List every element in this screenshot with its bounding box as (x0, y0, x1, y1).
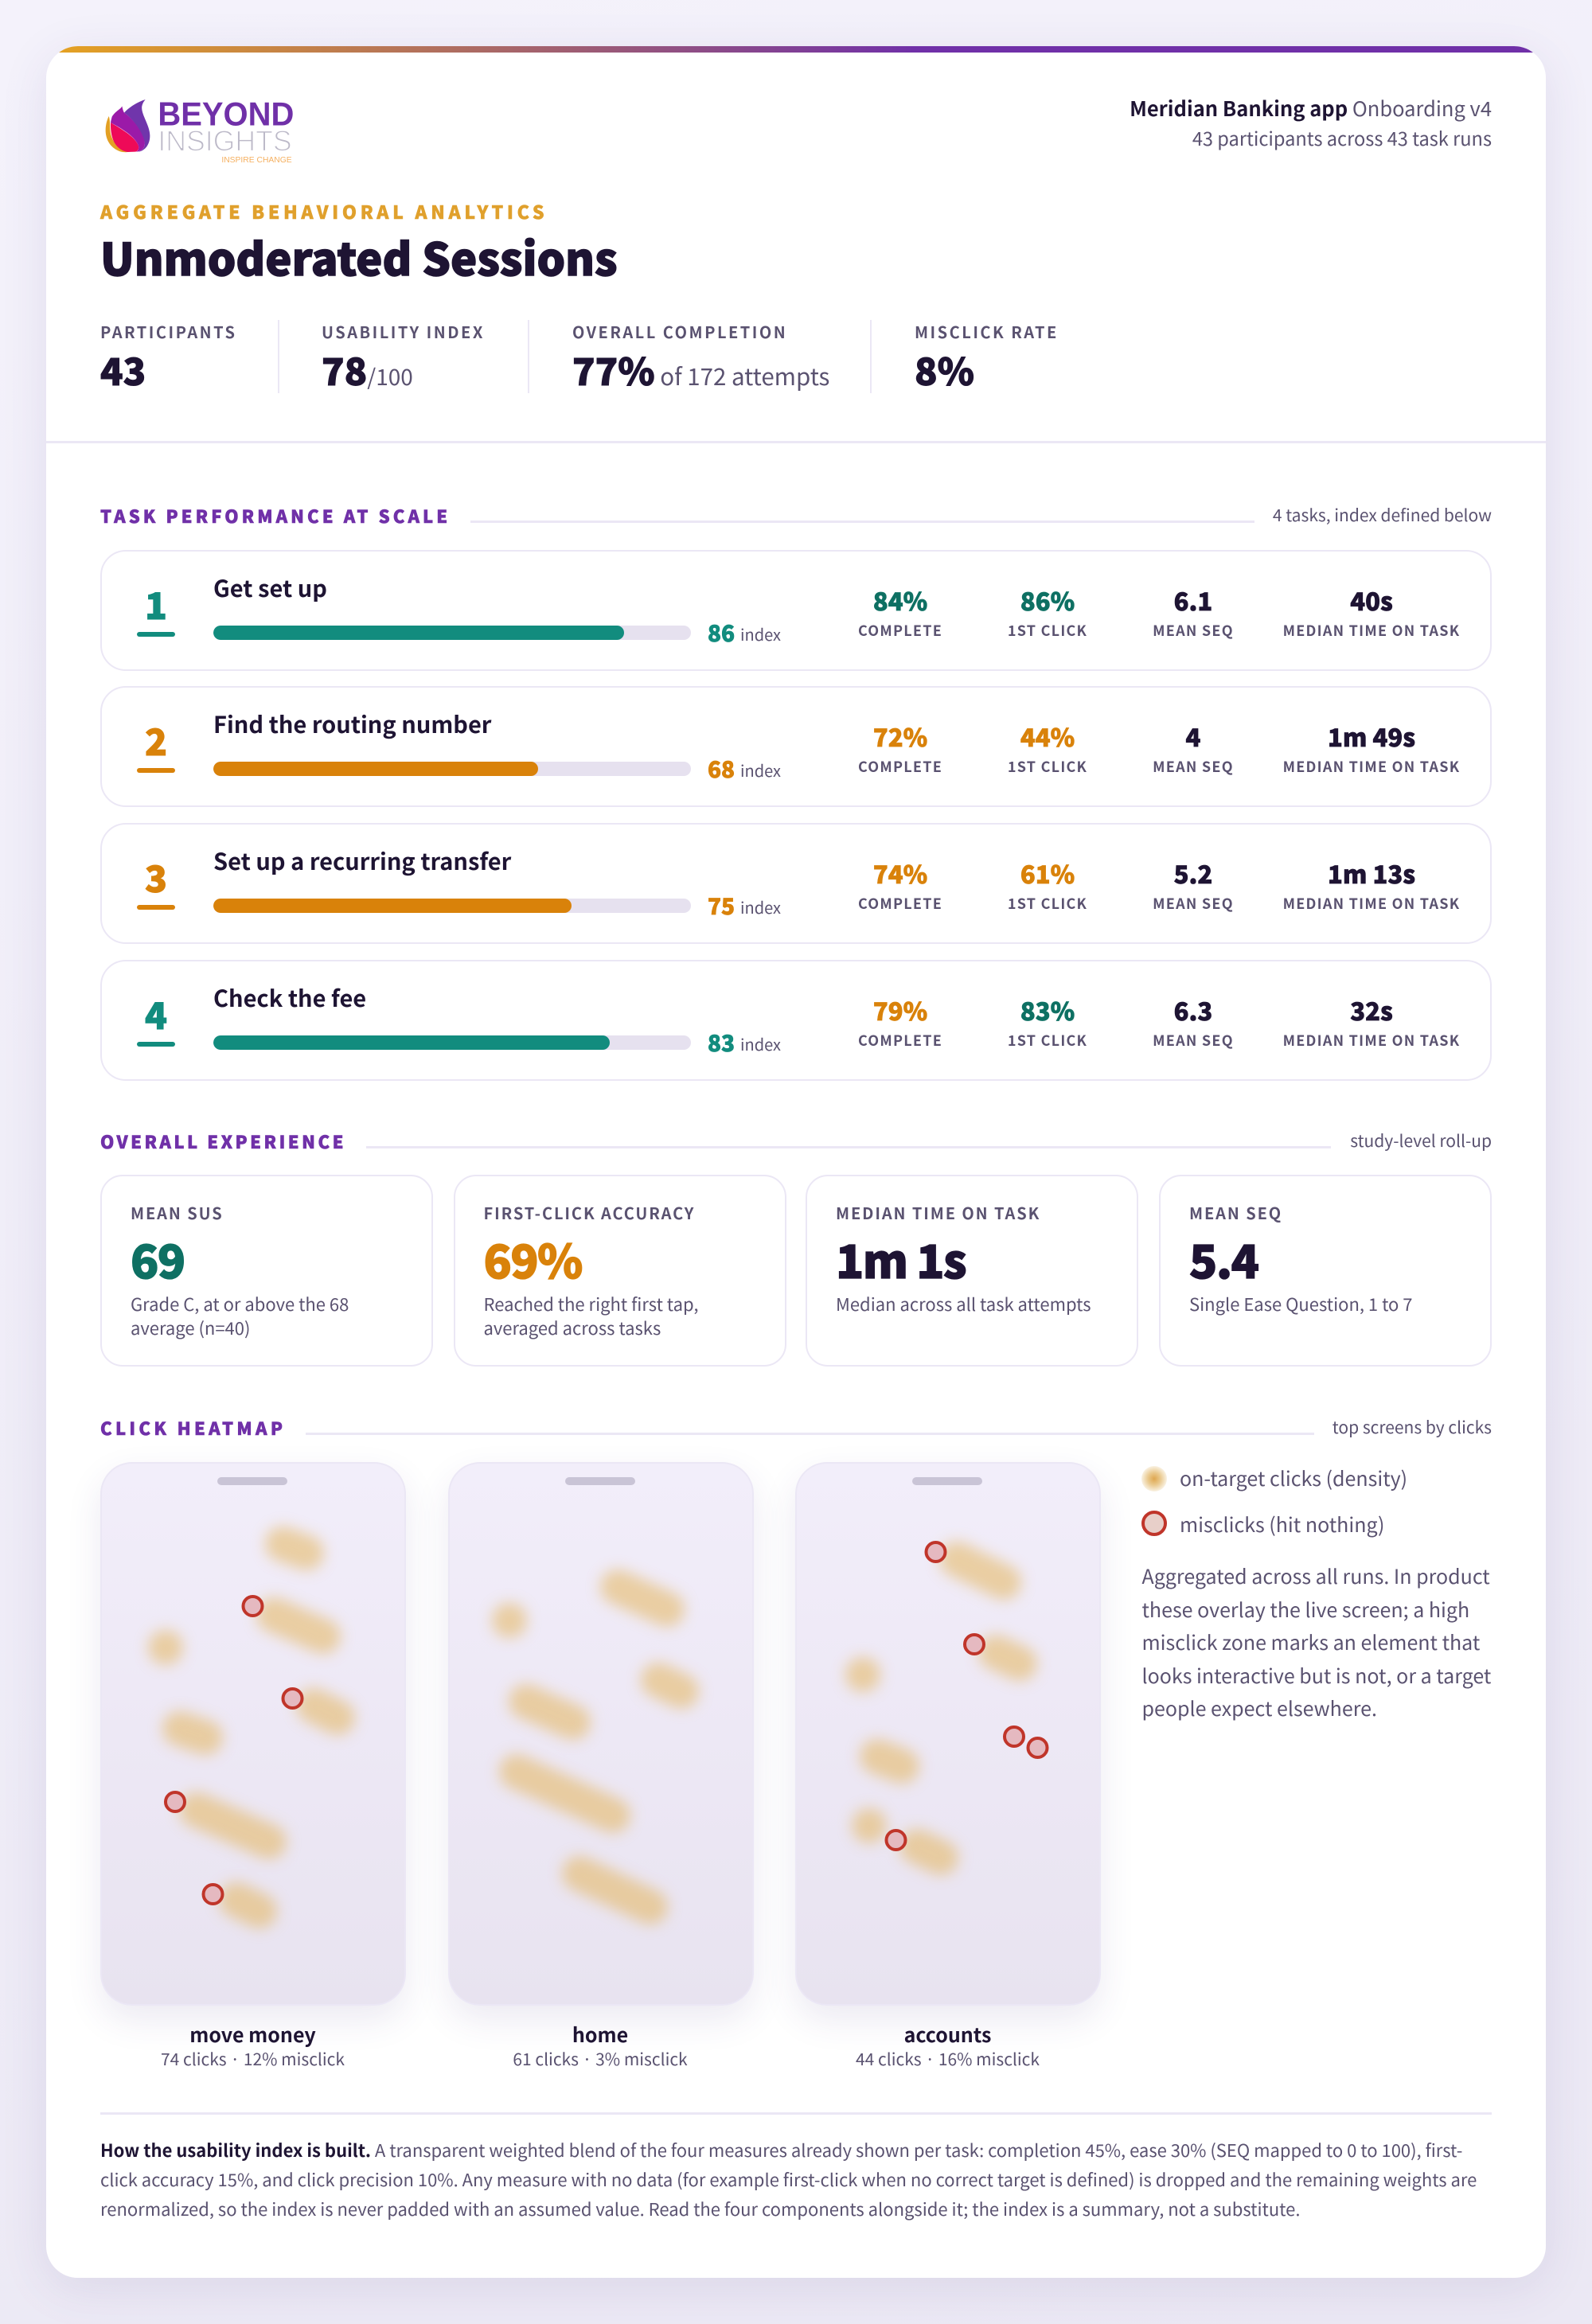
stat card: mean SUS: 69 (131, 1225, 185, 1292)
stat: overall completion (529, 320, 872, 393)
task row 2: 72% (873, 718, 927, 754)
caption: move money: move money (189, 2020, 316, 2049)
legend explanation: misclick zone marks an element that (1141, 1628, 1480, 1656)
stat card: median time on task: MEDIAN TIME ON TASK (836, 1201, 1040, 1224)
section heading: click heatmap: CLICK HEATMAP (100, 1415, 286, 1441)
task row 4: MEDIAN TIME ON TASK (1283, 1030, 1460, 1051)
task row 3: 1ST CLICK (1008, 893, 1087, 914)
stat card: first-click accuracy: FIRST-CLICK ACCURACY (484, 1201, 695, 1224)
section heading: click heatmap (100, 1415, 1492, 1441)
eyebrow: AGGREGATE BEHAVIORAL ANALYTICS (100, 197, 548, 224)
task row 1: 6.1 (1174, 582, 1212, 618)
task row 3: 74% (873, 855, 927, 891)
stat card: mean SEQ: MEAN SEQ (1189, 1201, 1282, 1224)
icon: on-target heat swatch (1141, 1466, 1167, 1491)
task row 3: MEDIAN TIME ON TASK (1283, 893, 1460, 914)
stats row (100, 320, 1059, 396)
section heading: overall experience: OVERALL EXPERIENCE (100, 1129, 346, 1154)
stat: participants: 43 (100, 341, 146, 396)
stat: overall completion: OVERALL COMPLETION (572, 320, 787, 343)
task row 1: 40s (1350, 582, 1393, 618)
task row 2: 44% (1020, 718, 1075, 754)
stat card: mean SUS: average (n=40) (131, 1315, 250, 1340)
task row 4: index (740, 1032, 781, 1055)
task row 1: 84% (873, 582, 927, 618)
task row 3: 61% (1020, 855, 1075, 891)
caption: accounts: accounts (904, 2020, 991, 2049)
task row 4: 4 (145, 988, 167, 1040)
stat: misclick rate (915, 320, 1059, 396)
task row 4: 79% (873, 992, 927, 1027)
stat card: mean SEQ (1159, 1175, 1492, 1367)
legend (1141, 1464, 1407, 1538)
task row 4 (100, 960, 1492, 1081)
caption: accounts (856, 2020, 1040, 2071)
stat: overall completion: 77% of 172 attempts (572, 341, 829, 396)
phone: home heatmap (447, 1462, 753, 2006)
task row 3: 1m 13s (1328, 855, 1415, 891)
caption: home: home (572, 2020, 628, 2049)
icon: misclick swatch (1141, 1511, 1167, 1536)
top gradient bar (46, 46, 1546, 53)
task row 3 (100, 823, 1492, 944)
task row 2: 2 (145, 714, 167, 766)
task row 1: MEAN SEQ (1153, 620, 1234, 641)
task row 4: 6.3 (1174, 992, 1212, 1027)
task row 4: 1ST CLICK (1008, 1030, 1087, 1051)
stat: usability index (279, 320, 529, 393)
logo: Beyond Insights: INSPIRE CHANGE (221, 156, 292, 165)
task row 1: index (740, 622, 781, 645)
task row 2: Find the routing number (213, 707, 491, 740)
stat: usability index: USABILITY INDEX (322, 320, 485, 343)
legend explanation (1141, 1562, 1491, 1722)
task row 4: MEAN SEQ (1153, 1030, 1234, 1051)
stat: misclick rate: MISCLICK RATE (915, 320, 1059, 343)
footnote: how the index is built: renormalized, so the index is never padded with an assumed value. Read the four components alongside it; the index is a summary, not a substitute. (100, 2196, 1300, 2221)
stat card: first-click accuracy: averaged across tasks (484, 1315, 661, 1340)
task row 3: index (740, 895, 781, 918)
task row 2: COMPLETE (858, 756, 942, 777)
caption: move money (161, 2020, 345, 2071)
task row 4: 32s (1350, 992, 1393, 1027)
study meta: Meridian Banking app Onboarding v4 (1130, 93, 1492, 123)
caption: move money: 74 clicks · 12% misclick (161, 2047, 345, 2071)
task row 4: 83 (708, 1027, 735, 1059)
legend explanation: looks interactive but is not, or a target (1141, 1660, 1491, 1689)
stat card: median time on task: Median across all task attempts (836, 1291, 1091, 1316)
stat card: mean SUS: MEAN SUS (131, 1201, 224, 1224)
task row 1: COMPLETE (858, 620, 942, 641)
stat card: mean SUS: Grade C, at or above the 68 (131, 1291, 349, 1316)
stat card: first-click accuracy (454, 1175, 786, 1367)
legend: on-target clicks (density) (1180, 1464, 1407, 1492)
stat card: mean SUS (100, 1175, 433, 1367)
task row 3: Set up a recurring transfer (213, 844, 511, 877)
task row 4: Check the fee (213, 981, 366, 1014)
task row 3: 3 (145, 851, 167, 903)
section heading: overall experience: study-level roll-up (1350, 1129, 1492, 1152)
legend explanation: Aggregated across all runs. In product (1141, 1562, 1490, 1590)
task row 1: 1 (145, 578, 167, 630)
task row 1: Get set up (213, 571, 327, 604)
task row 2: 4 (1186, 718, 1200, 754)
stat: participants: PARTICIPANTS (100, 320, 236, 343)
task row 4: COMPLETE (858, 1030, 942, 1051)
phone: accounts heatmap (795, 1462, 1101, 2006)
caption: home: 61 clicks · 3% misclick (513, 2047, 688, 2071)
legend explanation: these overlay the live screen; a high (1141, 1595, 1469, 1624)
footnote: how the index is built: How the usability index is built. A transparent weighted blend of the four measures already shown per task: completion 45%, ease 30% (SEQ mapped to 0 to 100), first- (100, 2137, 1462, 2162)
logo: Beyond Insights: INSIGHTS (158, 125, 292, 157)
legend: misclicks (hit nothing) (1180, 1510, 1384, 1538)
task row 3: MEAN SEQ (1153, 893, 1234, 914)
logo: Beyond Insights (105, 96, 294, 165)
stat card: first-click accuracy: 69% (484, 1225, 582, 1292)
phone: move money heatmap (100, 1462, 406, 2006)
section heading: task performance: TASK PERFORMANCE AT SCALE (100, 503, 451, 528)
caption: home (513, 2020, 688, 2071)
task row 3: COMPLETE (858, 893, 942, 914)
legend explanation: people expect elsewhere. (1141, 1694, 1377, 1722)
task row 1: MEDIAN TIME ON TASK (1283, 620, 1460, 641)
stat card: mean SEQ: Single Ease Question, 1 to 7 (1189, 1291, 1413, 1316)
caption: accounts: 44 clicks · 16% misclick (856, 2047, 1040, 2071)
task row 1: 1ST CLICK (1008, 620, 1087, 641)
section heading: task performance: 4 tasks, index defined below (1273, 503, 1492, 527)
stat card: first-click accuracy: Reached the right first tap, (484, 1291, 698, 1316)
study meta: 43 participants across 43 task runs (1192, 124, 1492, 151)
task row 2 (100, 686, 1492, 807)
task row 2: 1ST CLICK (1008, 756, 1087, 777)
task row 1 (100, 550, 1492, 671)
task row 2: MEDIAN TIME ON TASK (1283, 756, 1460, 777)
stat: usability index: 78/100 (322, 341, 413, 396)
task row 3: 5.2 (1174, 855, 1212, 891)
stat card: median time on task: 1m 1s (836, 1225, 966, 1292)
footnote: how the index is built (100, 2137, 1477, 2221)
logo: Beyond Insights: BEYOND (158, 96, 294, 132)
stat: participants (100, 320, 279, 393)
stat card: median time on task (806, 1175, 1138, 1367)
section heading: click heatmap: top screens by clicks (1333, 1415, 1492, 1439)
task row 1: 86% (1020, 582, 1075, 618)
stat card: mean SEQ: 5.4 (1189, 1225, 1258, 1292)
section heading: task performance (100, 503, 1492, 528)
task row 1: 86 (708, 617, 735, 649)
task row 4: 83% (1020, 992, 1075, 1027)
task row 2: index (740, 758, 781, 782)
task row 3: 75 (708, 890, 735, 922)
task row 2: 1m 49s (1328, 718, 1415, 754)
stat: misclick rate: 8% (915, 341, 974, 396)
task row 2: 68 (708, 753, 735, 785)
footnote: how the index is built: click accuracy 15%, and click precision 10%. Any measure with no data (for example first-click when no correct target is defined) is dropped and the remaining weights are (100, 2166, 1477, 2192)
task row 2: MEAN SEQ (1153, 756, 1234, 777)
section heading: overall experience (100, 1129, 1492, 1154)
title: Unmoderated Sessions (100, 224, 618, 289)
study meta (1130, 93, 1492, 151)
